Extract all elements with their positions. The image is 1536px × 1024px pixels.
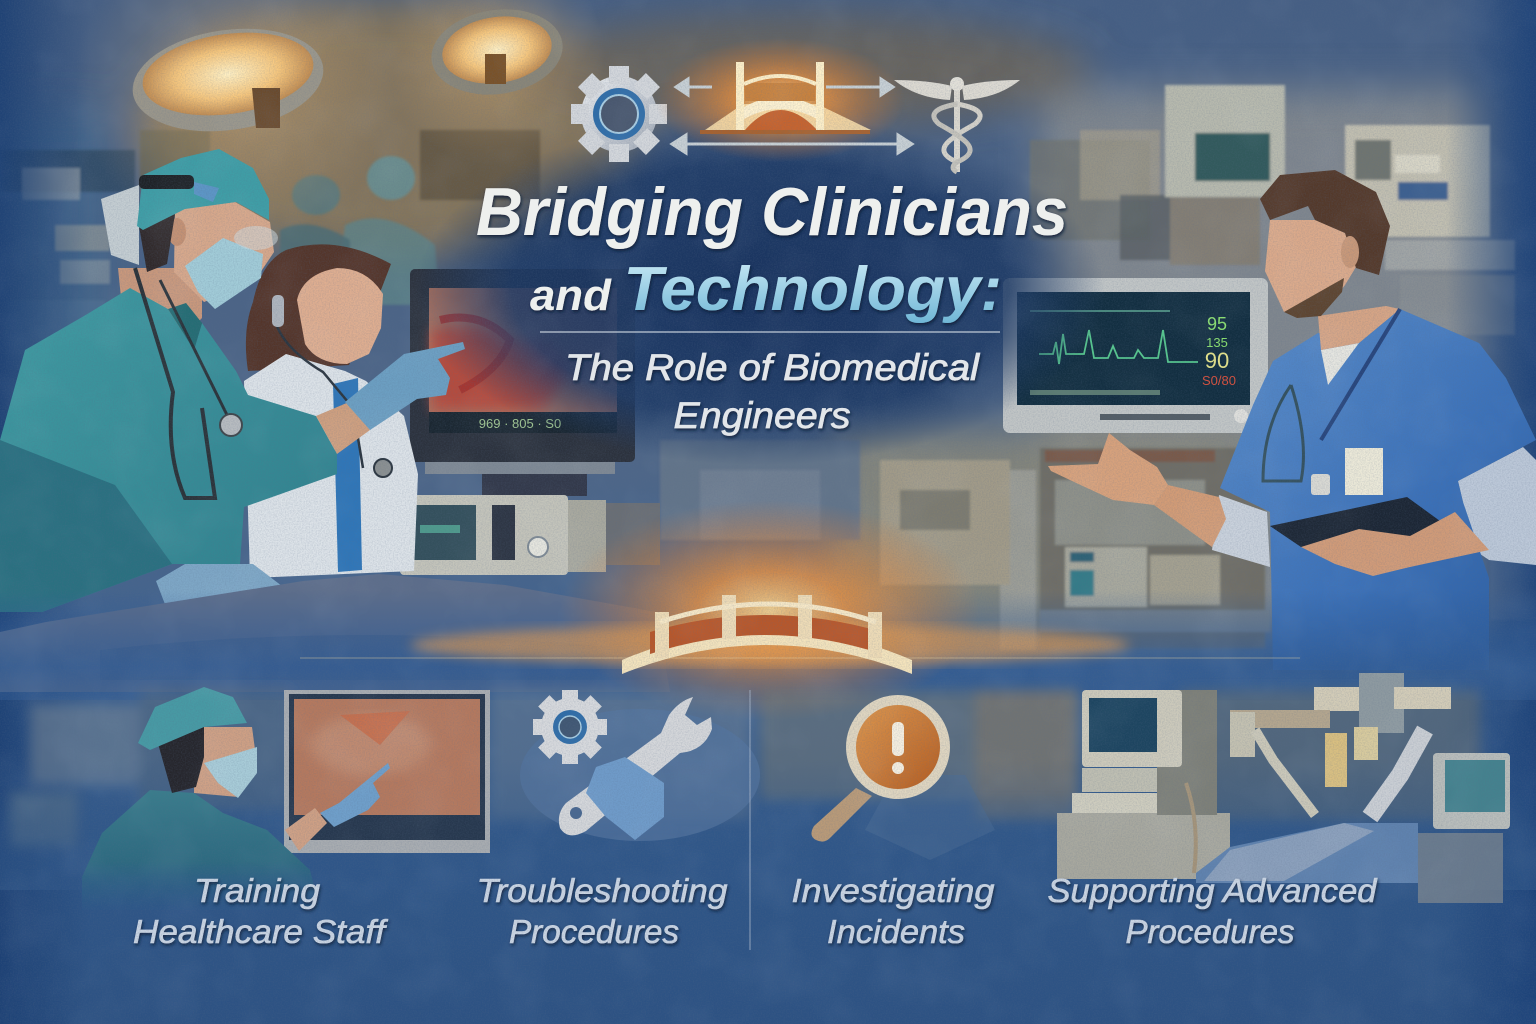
label: Healthcare Staff (133, 913, 389, 950)
label (133, 872, 389, 950)
panel: training healthcare staff (82, 687, 490, 950)
icon: caduceus (894, 77, 1020, 172)
label: Procedures (1126, 913, 1294, 950)
title block: Engineers (674, 395, 850, 436)
label: Troubleshooting (476, 872, 728, 909)
background equipment blocks (0, 85, 1536, 650)
navy title backdrop (415, 115, 1105, 465)
equipment cart (400, 495, 660, 575)
title divider (540, 331, 1000, 333)
engineer (1048, 170, 1536, 670)
right monitor: S0/80 (1202, 373, 1236, 388)
screen (284, 690, 490, 853)
label (1048, 872, 1378, 950)
right monitor: 90 (1205, 348, 1229, 373)
title line 1: Bridging Clinicians (476, 174, 1068, 250)
label (476, 872, 728, 950)
label (792, 872, 995, 950)
monitor readout: 969 · 805 · S0 (479, 416, 561, 431)
subtitle: The Role of Biomedical (565, 347, 981, 388)
nurse (244, 244, 418, 578)
icon: magnifying glass (811, 700, 995, 860)
icon: gear and wrench (520, 690, 760, 841)
icon: glowing bridge (655, 38, 905, 162)
icon: gear (571, 66, 667, 162)
divider (749, 690, 751, 950)
label: Procedures (509, 913, 679, 950)
title block (476, 174, 1068, 436)
lower fade (0, 760, 1536, 890)
panel: supporting advanced procedures (1048, 673, 1510, 950)
patient bed (0, 574, 670, 692)
robot and monitors (1057, 673, 1510, 903)
surgeon (0, 149, 465, 619)
label: Investigating (792, 872, 995, 909)
right monitor: 135 (1206, 335, 1228, 350)
fade over upper scene base (0, 590, 1536, 700)
trainer (82, 687, 390, 910)
right monitor (1003, 278, 1268, 433)
panel: investigating incidents (792, 700, 995, 950)
label: Supporting Advanced (1048, 872, 1378, 909)
title line 2: and Technology: (530, 255, 1002, 324)
right monitor: 95 (1207, 314, 1227, 334)
label: Training (194, 872, 321, 909)
surgical lights (75, 0, 605, 240)
left monitor: surgical view (410, 269, 635, 496)
panel: troubleshooting procedures (476, 690, 760, 950)
center bridge (300, 500, 1300, 720)
label: Incidents (827, 913, 965, 950)
lower band background (10, 690, 1480, 847)
top icon group: gear, bridge, caduceus (571, 38, 1020, 172)
arrows (672, 79, 912, 153)
